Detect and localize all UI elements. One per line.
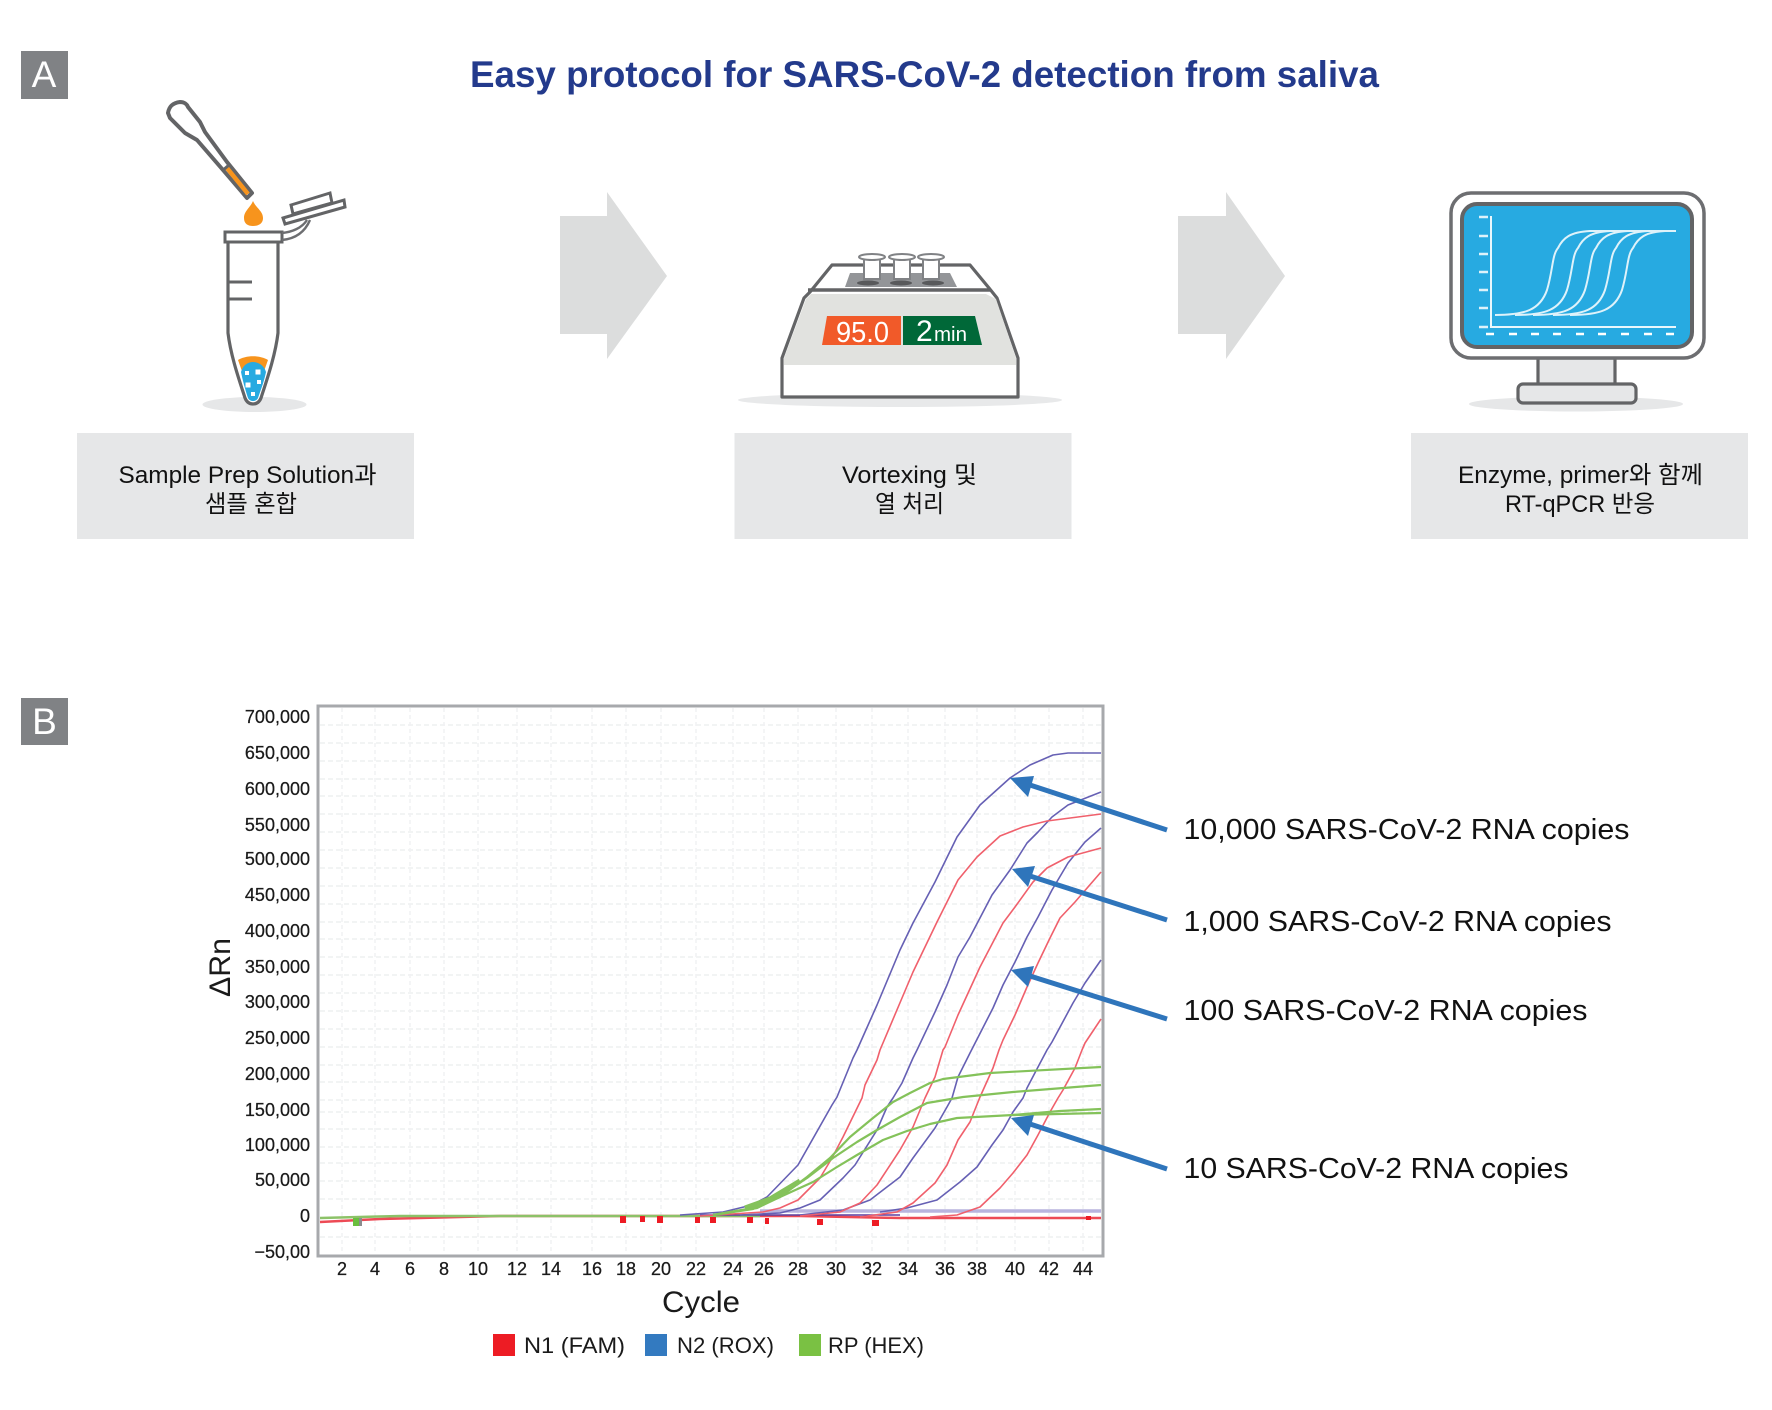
icon: heat block with display: min (934, 324, 967, 346)
x axis labels: 26 (754, 1259, 774, 1279)
panel label: B (21, 698, 68, 745)
y axis labels: 400,000 (245, 921, 310, 941)
arrow: 10 copies (1011, 1115, 1167, 1169)
y axis labels: 50,000 (255, 1170, 310, 1190)
arrow: step 1 to step 2 (560, 192, 667, 359)
N1 (FAM) curves (700, 814, 1101, 1217)
step 1 caption: Sample Prep Solution과 (118, 462, 376, 489)
y axis labels: 550,000 (245, 815, 310, 835)
x axis labels: 20 (651, 1259, 671, 1279)
legend: N2 (ROX) (677, 1333, 774, 1358)
x axis labels: 14 (541, 1259, 561, 1279)
x axis labels: 18 (616, 1259, 636, 1279)
x axis labels: 32 (862, 1259, 882, 1279)
x axis labels: 36 (935, 1259, 955, 1279)
x axis labels: 30 (826, 1259, 846, 1279)
x axis labels: 10 (468, 1259, 488, 1279)
amplification plot (318, 706, 1103, 1256)
step 3 caption: RT-qPCR 반응 (1505, 491, 1655, 518)
N2 (ROX) curves (680, 753, 1101, 1215)
x axis labels: 42 (1039, 1259, 1059, 1279)
x axis labels: 2 (337, 1259, 347, 1279)
y axis labels: 200,000 (245, 1064, 310, 1084)
step 3 caption: Enzyme, primer와 함께 (1458, 462, 1703, 489)
panel label: A (21, 51, 68, 99)
y axis labels: 0 (300, 1206, 310, 1226)
y axis labels: −50,00 (254, 1242, 310, 1262)
arrow: 10,000 copies (1010, 776, 1167, 830)
x axis labels: 40 (1005, 1259, 1025, 1279)
step 2 caption (734, 433, 1072, 539)
legend (493, 1333, 924, 1358)
label: 10 copies: 10 SARS-CoV-2 RNA copies (1184, 1153, 1568, 1185)
x axis labels: 34 (898, 1259, 918, 1279)
icon: heat block with display: 95.0 (836, 317, 889, 349)
x axis labels: 44 (1073, 1259, 1093, 1279)
x axis labels: 12 (507, 1259, 527, 1279)
RP (HEX) curves (713, 1067, 1101, 1215)
data markers (353, 1216, 1091, 1226)
y axis title: ΔRn (204, 938, 237, 997)
y axis labels: 450,000 (245, 885, 310, 905)
x axis labels: 28 (788, 1259, 808, 1279)
x axis labels: 16 (582, 1259, 602, 1279)
icon: monitor with amplification curves (1451, 193, 1704, 412)
y axis labels: 100,000 (245, 1135, 310, 1155)
baseline traces (320, 1211, 1101, 1222)
x axis labels (337, 1259, 1093, 1279)
step 1 caption: 샘플 혼합 (205, 491, 297, 518)
x axis labels: 4 (370, 1259, 380, 1279)
legend: N1 (FAM) (524, 1333, 625, 1358)
arrow: 1,000 copies (1012, 866, 1167, 920)
y axis labels: 650,000 (245, 743, 310, 763)
label: 100 copies: 100 SARS-CoV-2 RNA copies (1184, 995, 1588, 1027)
label: 1,000 copies: 1,000 SARS-CoV-2 RNA copies (1184, 906, 1612, 938)
step 2 caption: 열 처리 (875, 491, 944, 518)
icon: heat block with display (738, 254, 1062, 407)
y axis labels: 600,000 (245, 779, 310, 799)
arrow: step 2 to step 3 (1178, 192, 1285, 359)
panel label: B: B (32, 701, 57, 742)
x axis labels: 22 (686, 1259, 706, 1279)
legend: RP (HEX) (828, 1333, 924, 1358)
panel label: A: A (32, 54, 57, 95)
y axis labels: 500,000 (245, 849, 310, 869)
y axis labels: 300,000 (245, 992, 310, 1012)
step 3 caption (1411, 433, 1748, 539)
x axis labels: 8 (439, 1259, 449, 1279)
x axis labels: 38 (967, 1259, 987, 1279)
y axis labels (245, 707, 310, 1262)
title: Easy protocol for SARS-CoV-2 detection from saliva (470, 54, 1379, 95)
icon: pipette and sample tube (168, 102, 345, 412)
y axis labels: 250,000 (245, 1028, 310, 1048)
arrow: 100 copies (1011, 966, 1167, 1019)
y axis labels: 150,000 (245, 1100, 310, 1120)
x axis title: Cycle (662, 1286, 740, 1319)
step 2 caption: Vortexing 및 (842, 462, 977, 489)
icon: heat block with display: 2 (916, 315, 933, 348)
y axis labels: 350,000 (245, 957, 310, 977)
x axis labels: 24 (723, 1259, 743, 1279)
x axis labels: 6 (405, 1259, 415, 1279)
step 1 caption (77, 433, 414, 539)
y axis labels: 700,000 (245, 707, 310, 727)
label: 10,000 copies: 10,000 SARS-CoV-2 RNA copies (1184, 814, 1630, 846)
